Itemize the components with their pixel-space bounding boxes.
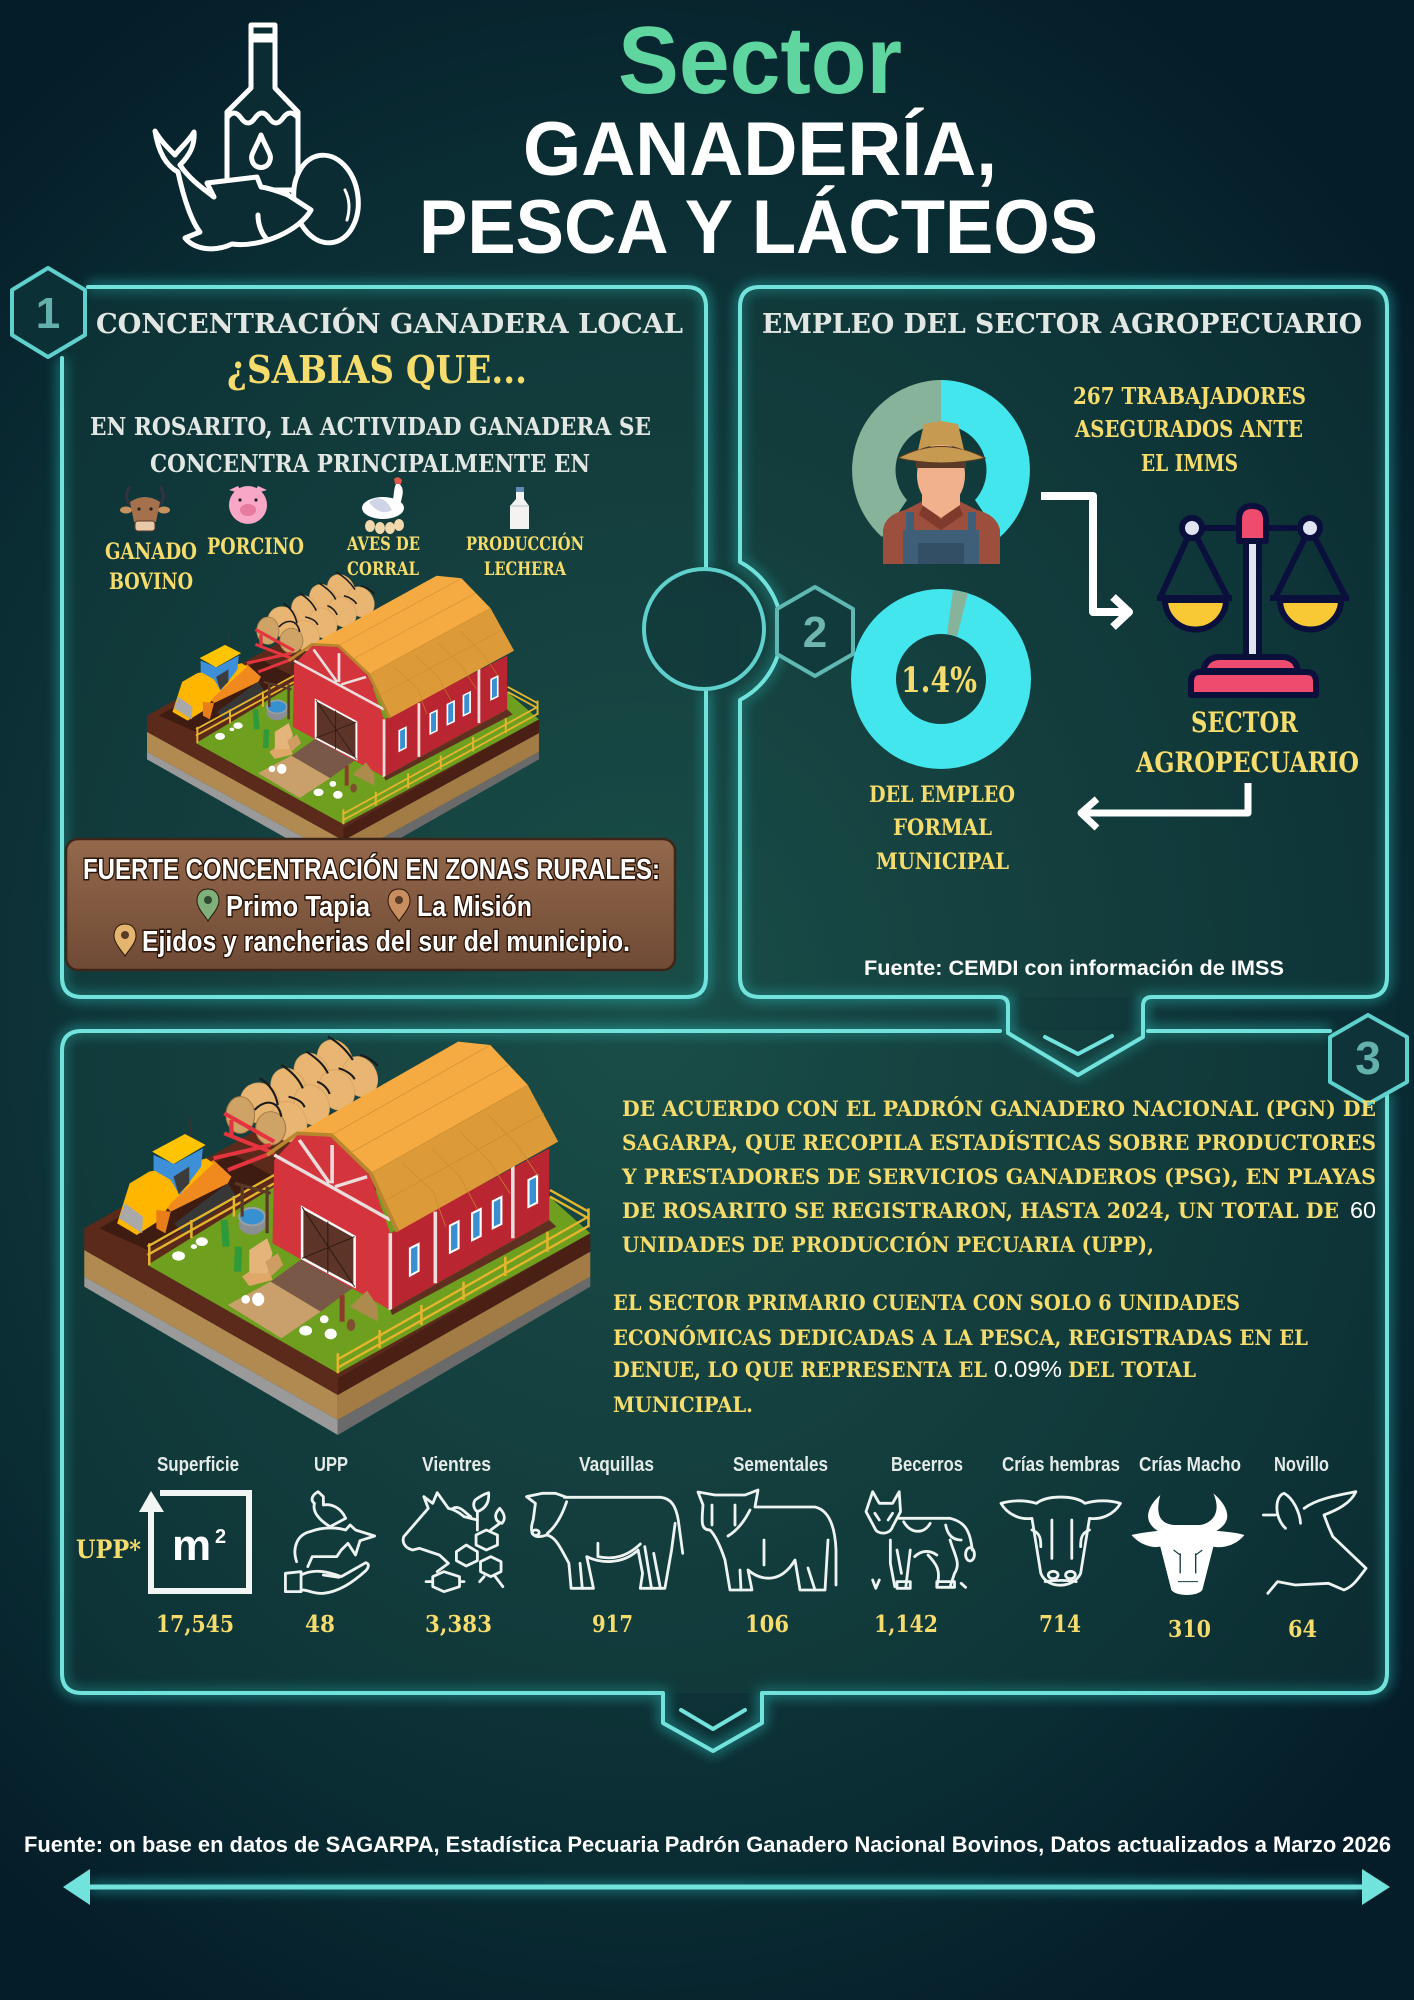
icon: becerros — [866, 1492, 974, 1588]
values row: 3,383 — [425, 1611, 492, 1638]
pin: La Misión — [388, 889, 410, 921]
icon: vaquillas — [526, 1493, 683, 1588]
text: padrón ganadero: Y PRESTADORES DE SERVICIOS GANADEROS (PSG), EN PLAYAS — [621, 1164, 1376, 1189]
icon: bottle, fish and egg — [155, 25, 364, 249]
column labels: Crías hembras — [1002, 1454, 1120, 1476]
text: sector primario: DENUE, LO QUE REPRESENTA EL — [613, 1357, 987, 1382]
column labels: Vaquillas — [579, 1454, 654, 1476]
title — [419, 7, 1098, 270]
text: sector primario: EL SECTOR PRIMARIO CUENTA CON SOLO 6 UNIDADES — [613, 1290, 1240, 1315]
panel 3 border — [62, 1031, 1387, 1751]
text: 267 trabajadores: EL IMMS — [1141, 450, 1238, 477]
donut chart: 1.4% — [874, 590, 1008, 746]
text: padrón ganadero: SAGARPA, QUE RECOPILA ESTADÍSTICAS SOBRE PRODUCTORES — [622, 1130, 1376, 1155]
label: aves de corral — [346, 533, 420, 580]
badge 1 — [12, 268, 85, 357]
column labels: UPP — [314, 1454, 348, 1476]
values row — [156, 1611, 1317, 1643]
arrow: to donut — [1081, 783, 1248, 828]
title: Ganadería: GANADERÍA, — [523, 107, 997, 192]
values row: 106 — [745, 1611, 789, 1638]
badge 3 — [1330, 1015, 1407, 1104]
label: porcino: PORCINO — [207, 534, 304, 560]
panel 3 fill — [62, 1031, 1387, 1693]
connector circle — [644, 569, 764, 689]
label: sector agropecuario — [1135, 706, 1359, 779]
icon: farmer — [883, 421, 1000, 564]
values row: 310 — [1168, 1616, 1211, 1643]
badge 2 — [777, 587, 853, 676]
text: padrón ganadero: DE ROSARITO SE REGISTRARON, HASTA 2024, UN TOTAL DE — [622, 1198, 1339, 1223]
icon: superficie m2: 2 — [215, 1526, 226, 1548]
panel 2 border — [740, 287, 1387, 1075]
column labels: Sementales — [733, 1454, 828, 1476]
label: del empleo formal: MUNICIPAL — [876, 849, 1009, 875]
text: sector primario: 0.09% — [994, 1356, 1062, 1382]
place: Ejidos: Ejidos y rancherias del sur del municipio. — [142, 926, 630, 958]
text: sector primario: ECONÓMICAS DEDICADAS A LA PESCA, REGISTRADAS EN EL — [613, 1325, 1308, 1350]
text: sector primario: MUNICIPAL. — [613, 1392, 753, 1417]
label: del empleo formal — [869, 782, 1015, 875]
icon: cow — [120, 487, 170, 531]
panel: concentración ganadera — [66, 306, 683, 970]
icon: crías hembras — [1001, 1497, 1120, 1585]
heading: empleo: EMPLEO DEL SECTOR AGROPECUARIO — [762, 309, 1362, 340]
label: ganado bovino: BOVINO — [109, 569, 193, 595]
column labels: Becerros — [891, 1454, 963, 1476]
label: del empleo formal: DEL EMPLEO — [869, 782, 1015, 808]
illustration: farm large — [84, 1035, 590, 1435]
label: producción lechera — [466, 532, 584, 580]
label: producción lechera: PRODUCCIÓN — [466, 532, 584, 555]
title: Pesca y Lácteos: PESCA Y LÁCTEOS — [419, 185, 1098, 270]
place: La Misión: La Misión — [417, 891, 532, 923]
icon: sementales — [698, 1490, 836, 1590]
callout heading: FUERTE CONCENTRACIÓN EN ZONAS RURALES: — [83, 852, 660, 886]
arrow: double headed — [63, 1869, 1390, 1905]
icon: crías macho — [1132, 1493, 1244, 1595]
column labels — [157, 1454, 1329, 1476]
panel: empleo — [762, 309, 1362, 980]
title: Sector: Sector — [618, 7, 902, 114]
values row: 714 — [1039, 1611, 1081, 1638]
icon: hen — [362, 477, 404, 534]
icon: superficie m2 — [139, 1491, 249, 1591]
text: sector primario — [613, 1290, 1308, 1417]
icon: vientres — [403, 1493, 504, 1592]
donut chart: trabajadores — [852, 380, 1030, 537]
label: aves de corral: CORRAL — [347, 558, 419, 580]
chevron under panel 2 — [1045, 1036, 1112, 1054]
icon: upp animals — [285, 1492, 375, 1593]
value 1.4%: 1.4% — [901, 660, 977, 701]
label: aves de corral: AVES DE — [346, 533, 420, 555]
column labels: Vientres — [422, 1454, 491, 1476]
text: 267 trabajadores — [1073, 383, 1306, 477]
label: del empleo formal: FORMAL — [893, 815, 992, 841]
values row: 1,142 — [874, 1611, 938, 1638]
label: sector agropecuario: AGROPECUARIO — [1135, 746, 1359, 779]
icon: pig — [229, 486, 267, 524]
source: panel 2: Fuente: CEMDI con información de IMSS — [864, 957, 1284, 980]
badge 1: 1 — [36, 289, 60, 338]
text: sector primario: DEL TOTAL — [1068, 1357, 1196, 1382]
values row: 917 — [592, 1611, 633, 1638]
icon: milk bottle — [510, 487, 529, 529]
source: footer: Fuente: on base en datos de SAGARPA, Estadística Pecuaria Padrón Ganadero Nacional Bovinos, Datos actualizados a Marzo 2026 — [24, 1832, 1391, 1857]
arrow: to sector — [1041, 496, 1129, 627]
column labels: Crías Macho — [1139, 1454, 1241, 1476]
label: producción lechera: LECHERA — [484, 558, 566, 580]
column labels: Superficie — [157, 1454, 239, 1476]
panel 1 border — [62, 287, 706, 997]
column labels: Novillo — [1274, 1454, 1329, 1476]
heading: sabias que: ¿SABIAS QUE... — [227, 347, 527, 392]
icon: novillo — [1263, 1492, 1366, 1593]
values row: 64 — [1288, 1616, 1317, 1643]
text: padrón ganadero: UNIDADES DE PRODUCCIÓN PECUARIA (UPP), — [622, 1232, 1154, 1257]
panel: padrón ganadero — [76, 1035, 1376, 1643]
intro text: EN ROSARITO, LA ACTIVIDAD GANADERA SE — [90, 412, 651, 441]
pin: Ejidos — [114, 924, 136, 956]
text: padrón ganadero: 60 — [1350, 1197, 1376, 1223]
illustration: farm small — [147, 571, 539, 871]
row label: UPP*: UPP* — [76, 1535, 141, 1564]
label: sector agropecuario: SECTOR — [1191, 706, 1299, 739]
intro text — [90, 412, 651, 478]
frame glow — [62, 287, 1387, 1887]
badge 2: 2 — [803, 608, 827, 657]
label: ganado bovino — [105, 539, 197, 595]
panel 2 fill — [740, 287, 1387, 997]
badge 3: 3 — [1355, 1032, 1381, 1084]
icon: superficie m2: m — [172, 1521, 211, 1570]
values row: 48 — [305, 1611, 335, 1638]
intro text: CONCENTRA PRINCIPALMENTE EN — [150, 449, 590, 478]
text: padrón ganadero: DE ACUERDO CON EL PADRÓN GANADERO NACIONAL (PGN) DE — [622, 1096, 1376, 1121]
text: padrón ganadero — [621, 1096, 1376, 1257]
values row: 17,545 — [156, 1611, 234, 1638]
heading: concentración: CONCENTRACIÓN GANADERA LOCAL — [96, 306, 683, 340]
panel frames — [62, 287, 1387, 1887]
label: ganado bovino: GANADO — [105, 539, 197, 565]
text: 267 trabajadores: ASEGURADOS ANTE — [1074, 416, 1303, 443]
chevron under panel 3 — [681, 1710, 745, 1729]
pin: Primo Tapia — [197, 889, 219, 921]
place: Primo Tapia: Primo Tapia — [226, 891, 371, 923]
text: 267 trabajadores: 267 TRABAJADORES — [1073, 383, 1306, 410]
callout: zonas rurales — [66, 839, 675, 970]
icon: balance scale — [1157, 506, 1349, 695]
panel 1 fill — [62, 287, 706, 997]
